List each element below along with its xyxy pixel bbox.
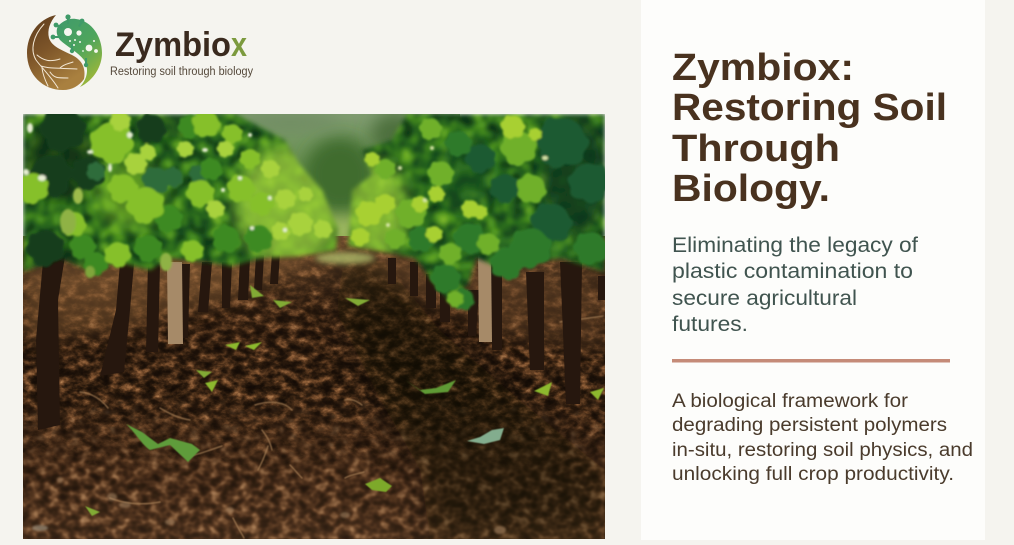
wordmark: Zymbio xyxy=(115,26,231,64)
body text xyxy=(672,391,973,485)
photo: vineyard rows over tilled soil xyxy=(13,102,616,539)
body text: unlocking full crop productivity. xyxy=(672,464,954,485)
heading: Biology. xyxy=(672,168,830,210)
heading: Zymbiox: xyxy=(672,47,854,89)
photo: sunlit leaf highlights xyxy=(23,123,287,232)
heading: Restoring Soil xyxy=(672,87,947,129)
photo: pale roots in the soil xyxy=(80,316,603,538)
subtitle: plastic contamination to xyxy=(672,260,913,283)
photo: grape clusters xyxy=(60,188,172,278)
wordmark: x xyxy=(231,26,247,64)
photo: left vine foliage xyxy=(23,114,340,280)
body text: degrading persistent polymers xyxy=(672,415,947,436)
heading xyxy=(672,47,947,210)
subtitle xyxy=(672,234,918,336)
icon detail: root lines xyxy=(33,24,77,88)
subtitle: Eliminating the legacy of xyxy=(672,234,918,257)
tagline: Restoring soil through biology xyxy=(110,66,253,78)
subtitle: futures. xyxy=(672,313,748,336)
photo: tilled soil xyxy=(23,236,605,539)
icon: soil and microbe yin-yang emblem xyxy=(27,14,102,90)
photo: vine trunks and posts xyxy=(36,240,605,430)
accent rule xyxy=(672,359,950,362)
photo: distant hills xyxy=(214,114,460,236)
photo: right vine foliage xyxy=(346,114,605,312)
logo: Zymbiox brand mark and wordmark xyxy=(27,14,253,90)
icon detail: microbe spikes and pores xyxy=(51,14,88,67)
heading: Through xyxy=(672,128,840,170)
subtitle: secure agricultural xyxy=(672,287,857,310)
body text: A biological framework for xyxy=(672,391,909,412)
panel: title and description xyxy=(641,0,985,540)
photo: wooden stakes xyxy=(167,250,492,344)
body text: in-situ, restoring soil physics, and xyxy=(672,440,973,461)
photo: pale pebbles xyxy=(32,477,506,534)
photo: seedlings on the soil xyxy=(85,285,604,516)
